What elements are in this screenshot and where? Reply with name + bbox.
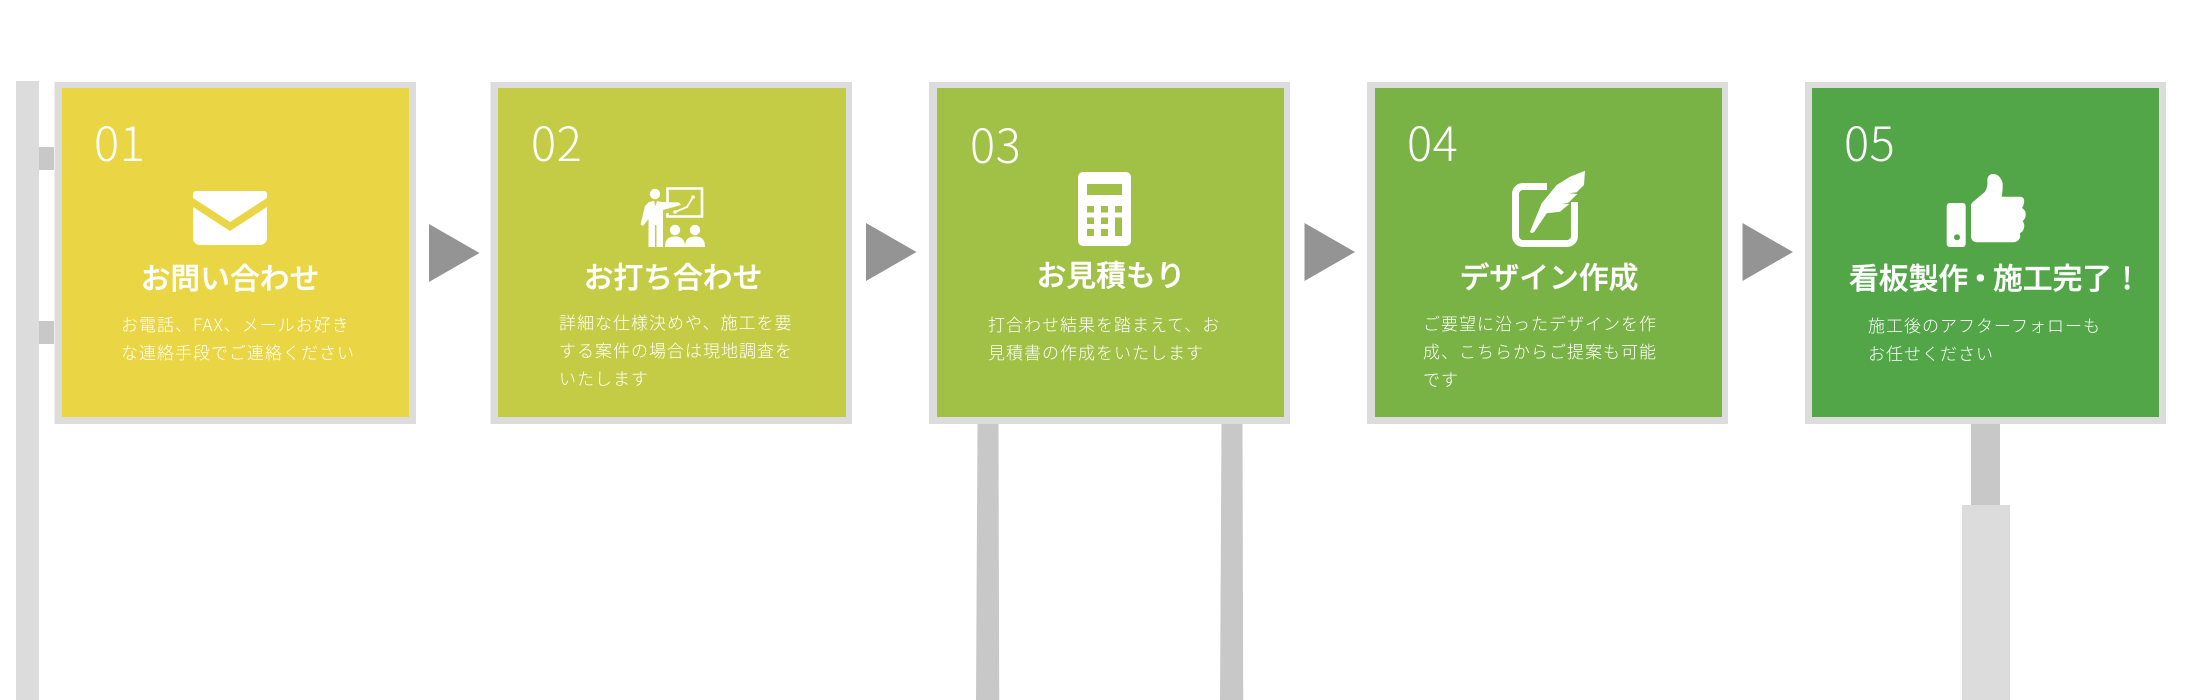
description: design: 成、こちらからご提案も可能 — [1423, 338, 1657, 363]
step number 03: 03 — [970, 108, 1021, 177]
arrow 1 — [429, 224, 480, 282]
description: inquiry: お電話、FAX、メールお好き — [121, 311, 350, 336]
panel: step 3 estimate — [929, 82, 1290, 424]
heading: completion: ! — [2122, 254, 2132, 298]
step number 01: 01 — [94, 106, 145, 175]
heading: estimate: お見積もり — [1037, 251, 1185, 295]
heading: meeting: お打ち合わせ — [584, 253, 762, 297]
icon: feather and square — [1516, 171, 1585, 244]
icon: envelope — [193, 191, 267, 245]
sign legs for step 3 — [976, 424, 1243, 700]
description: estimate — [988, 311, 1220, 364]
description: inquiry — [121, 311, 355, 364]
heading: completion: 施工完了 — [1993, 254, 2112, 298]
arrow 2 — [866, 223, 916, 281]
description: completion: 施工後のアフターフォローも — [1868, 312, 2101, 337]
description: completion: お任せください — [1868, 340, 1994, 365]
heading: completion: ・ — [1966, 254, 1995, 298]
description: meeting: 詳細な仕様決めや、施工を要 — [559, 309, 792, 334]
description: meeting: いたします — [559, 365, 649, 390]
step number 05: 05 — [1844, 106, 1895, 175]
description: design: です — [1423, 366, 1459, 391]
panel: step 1 inquiry — [54, 82, 416, 424]
description: estimate: 打合わせ結果を踏まえて、お — [988, 311, 1220, 336]
description: meeting — [559, 309, 793, 390]
panel: step 5 completion — [1805, 82, 2166, 424]
heading: design: デザイン作成 — [1460, 253, 1638, 297]
description: design: ご要望に沿ったデザインを作 — [1423, 310, 1657, 335]
panel: step 2 meeting — [490, 82, 852, 424]
arrow 3 — [1304, 223, 1355, 281]
wall pole with brackets — [16, 81, 54, 700]
description: estimate: 見積書の作成をいたします — [988, 339, 1204, 364]
icon: thumbs up — [1947, 174, 2026, 247]
step number 04: 04 — [1407, 106, 1458, 175]
description: meeting: する案件の場合は現地調査を — [559, 337, 793, 362]
icon: calculator — [1078, 172, 1131, 246]
panel: step 4 design — [1367, 82, 1728, 424]
description: design — [1423, 310, 1657, 391]
description: inquiry: な連絡手段でご連絡ください — [121, 339, 355, 364]
step number 02: 02 — [531, 106, 582, 175]
heading: completion: 看板製作 — [1849, 254, 1968, 298]
arrow 4 — [1742, 223, 1793, 281]
sign post for step 5 — [1962, 423, 2010, 700]
icon: presenter with audience — [640, 188, 705, 247]
heading: inquiry: お問い合わせ — [141, 254, 319, 298]
description: completion — [1868, 312, 2101, 365]
